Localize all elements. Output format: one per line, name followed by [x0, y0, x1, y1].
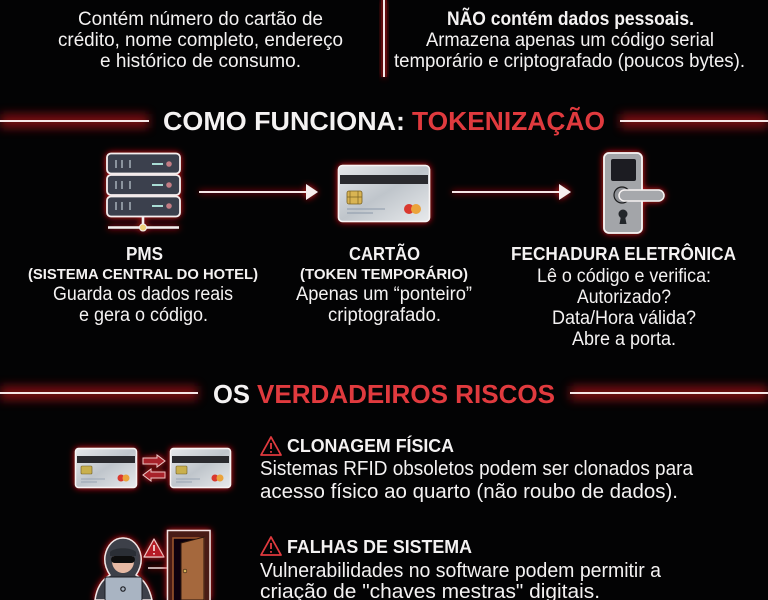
step: fechadura eletrônica	[511, 243, 736, 350]
text block: dados do cartão de crédito: e histórico de consumo.	[100, 51, 301, 72]
icon: aviso	[261, 437, 281, 455]
icon: setas de troca	[143, 455, 165, 481]
heading: como funciona: COMO FUNCIONA:	[163, 106, 405, 136]
icon: seta até a porta	[148, 563, 178, 573]
icon: triângulo de alerta	[144, 539, 164, 557]
text block: dados do cartão do hotel	[394, 8, 745, 72]
risk: falhas de sistema: FALHAS DE SISTEMA	[287, 537, 472, 557]
risk: falhas de sistema: Vulnerabilidades no software podem permitir a	[260, 560, 662, 582]
step: fechadura eletrônica: Abre a porta.	[572, 329, 676, 350]
step: PMS: Guarda os dados reais	[53, 284, 233, 305]
risk: falhas de sistema	[260, 537, 662, 600]
icon: servidor PMS	[107, 154, 180, 231]
icon: hacker	[95, 538, 152, 600]
text block: dados do cartão de crédito	[58, 9, 343, 72]
icon: cartão original	[76, 448, 136, 488]
arrow: cartão para fechadura	[452, 184, 571, 200]
step: cartão	[296, 243, 472, 326]
text block: dados do cartão do hotel: Armazena apenas um código serial	[426, 30, 714, 51]
step: PMS: (SISTEMA CENTRAL DO HOTEL)	[28, 266, 258, 283]
step: PMS: e gera o código.	[79, 305, 208, 326]
icon: clonagem de cartões	[76, 448, 230, 488]
step: fechadura eletrônica: Data/Hora válida?	[552, 308, 696, 329]
heading: como funciona	[0, 106, 768, 136]
risk: clonagem física: acesso físico ao quarto (não roubo de dados).	[260, 481, 678, 503]
icon: aviso	[261, 537, 281, 555]
risk: clonagem física: Sistemas RFID obsoletos podem ser clonados para	[260, 458, 694, 480]
step: cartão: (TOKEN TEMPORÁRIO)	[300, 266, 468, 283]
icon: fechadura eletrônica	[604, 153, 664, 233]
text block: dados do cartão de crédito: Contém número do cartão de	[78, 9, 323, 30]
text block: dados do cartão de crédito: crédito, nome completo, endereço	[58, 30, 343, 51]
heading: os verdadeiros riscos	[0, 379, 768, 409]
text block: dados do cartão do hotel: NÃO contém dados pessoais.	[447, 8, 694, 30]
step: fechadura eletrônica: Lê o código e verifica:	[537, 266, 711, 287]
heading: como funciona: TOKENIZAÇÃO	[412, 106, 605, 136]
icon: cartão clonado	[170, 448, 230, 488]
risk: clonagem física	[260, 435, 694, 503]
step: cartão: criptografado.	[328, 305, 441, 326]
icon: porta	[168, 530, 210, 600]
step: PMS: PMS	[126, 244, 163, 264]
vertical divider	[381, 0, 387, 77]
heading: os verdadeiros riscos: OS	[213, 379, 250, 409]
icon: cartão	[338, 166, 430, 222]
step: cartão: Apenas um “ponteiro”	[296, 284, 472, 305]
risk: clonagem física: CLONAGEM FÍSICA	[287, 435, 454, 456]
icon: hacker e porta	[95, 530, 210, 600]
arrow: PMS para cartão	[199, 184, 318, 200]
step: PMS	[28, 244, 258, 326]
text block: dados do cartão do hotel: temporário e criptografado (poucos bytes).	[394, 51, 745, 72]
step: fechadura eletrônica: FECHADURA ELETRÔNICA	[511, 243, 736, 264]
step: fechadura eletrônica: Autorizado?	[577, 287, 671, 308]
step: cartão: CARTÃO	[349, 243, 420, 264]
heading: os verdadeiros riscos: VERDADEIROS RISCOS	[257, 379, 555, 409]
